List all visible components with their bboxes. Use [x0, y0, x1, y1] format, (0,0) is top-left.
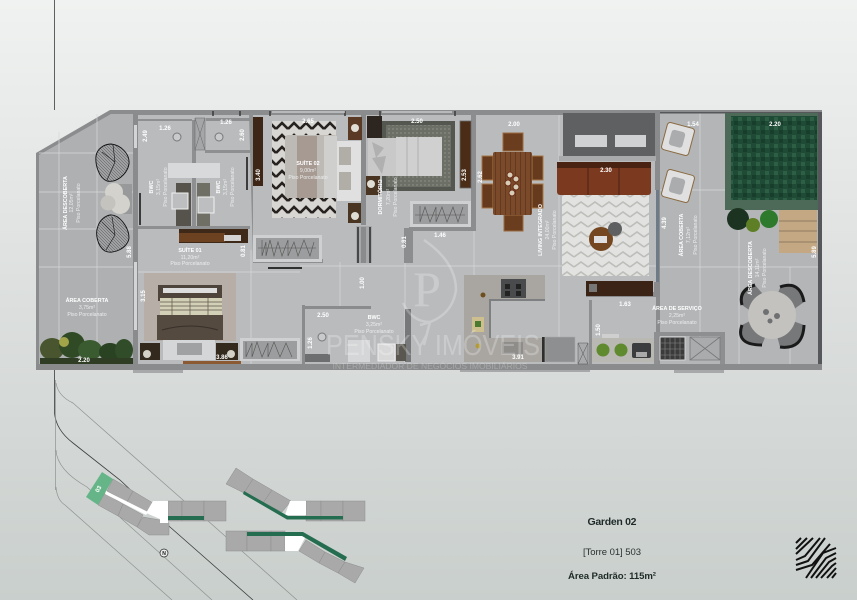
sofa	[557, 162, 651, 195]
label: area de servico	[652, 305, 702, 326]
plants right	[727, 208, 778, 232]
dorm nightstand top	[367, 116, 382, 138]
dimensions: 5.88	[127, 246, 133, 258]
rug living	[562, 195, 649, 276]
closet upper	[253, 235, 322, 262]
toilet left	[173, 133, 181, 141]
label: dormitorio: Piso Porcelanato	[393, 177, 399, 217]
label: area descoberta right: Piso Porcelanato	[762, 248, 768, 288]
dimensions: 1.26	[308, 337, 314, 349]
nightstand right	[216, 343, 238, 360]
dimensions: 1.63	[619, 302, 631, 308]
building slab	[36, 110, 822, 370]
label: area descoberta left: Piso Porcelanato	[76, 183, 82, 223]
dimensions	[78, 119, 818, 364]
label: area de servico: ÁREA DE SERVIÇO	[652, 305, 702, 312]
right wall	[818, 112, 822, 364]
caption: garden 02: Garden 02	[588, 516, 637, 528]
label: suite 02: 9,00m²	[300, 168, 316, 174]
label: bwc left: Piso Porcelanato	[163, 167, 169, 207]
label: dormitorio	[376, 177, 399, 217]
wardrobe suite 01	[253, 117, 263, 186]
highlighted unit 503: 03	[95, 485, 104, 494]
small shaft	[578, 343, 588, 364]
dimensions: 2.50	[411, 119, 423, 125]
label: suite 02: SUÍTE 02	[296, 159, 320, 167]
label: area coberta left	[66, 297, 109, 318]
sink left	[172, 193, 188, 209]
floor grid	[39, 113, 818, 364]
icon: striped logo	[796, 538, 836, 578]
label: bwc lower	[354, 315, 394, 335]
furniture: woven armchair top	[96, 144, 129, 181]
watermark	[326, 240, 540, 371]
tower 01 corridor	[105, 491, 148, 515]
coffee table	[589, 222, 622, 251]
suite 02 nightstand top	[348, 117, 362, 140]
label: suite 01	[170, 246, 210, 267]
dimensions: 3.86	[216, 355, 228, 361]
label: suite 01: 11,20m²	[181, 255, 200, 261]
suite 02 bed	[285, 135, 361, 201]
dimensions: 1.00	[360, 277, 366, 289]
label: area coberta right: ÁREA COBERTA	[678, 213, 685, 256]
dimensions: 2.00	[508, 122, 520, 128]
strip floor	[183, 361, 241, 364]
label: area coberta left: 3,75m²	[79, 305, 95, 311]
label: bwc lower: 3,25m²	[366, 322, 382, 328]
stairs	[779, 210, 817, 253]
caption: standard area: Área Padrão: 115m²	[568, 570, 656, 582]
tower 02 green strip	[243, 491, 343, 520]
room labels	[62, 159, 768, 335]
wall: left terrace wall	[133, 113, 138, 364]
dimensions: 3.15	[141, 290, 147, 302]
watermark: PENSKY IMÓVEIS	[326, 329, 540, 362]
dining set	[482, 133, 543, 231]
label: area descoberta right: ÁREA DESCOBERTA	[747, 241, 754, 295]
dorm wardrobe	[460, 121, 471, 188]
tower 01 courtyard	[146, 501, 168, 523]
closet lower	[240, 338, 300, 361]
dimensions: 3.91	[512, 355, 524, 361]
suite 02 rug	[272, 121, 336, 218]
cabinet right	[197, 183, 210, 226]
rug suite 01	[144, 273, 236, 341]
label: living integrado: LIVING INTEGRADO	[538, 204, 544, 256]
round table and chairs	[741, 285, 804, 347]
site plan	[56, 380, 365, 600]
plants left terrace	[40, 332, 133, 364]
label: bwc right: Piso Porcelanato	[230, 167, 236, 207]
highlighted unit 503	[86, 472, 113, 505]
wall: top window marks	[213, 111, 455, 116]
label: living integrado: 24,00m²	[545, 220, 551, 240]
wall: suite and dorm divider	[361, 113, 366, 225]
wall: service area	[589, 300, 725, 364]
watermark: P	[413, 261, 441, 317]
armchair top	[661, 122, 695, 156]
label: living integrado	[538, 204, 558, 256]
label: area descoberta left: ÁREA DESCOBERTA	[62, 176, 69, 230]
tower 03	[226, 531, 364, 583]
bed suite 01	[157, 285, 223, 360]
street line behind plan	[54, 0, 253, 600]
dimensions: 2.65	[302, 119, 314, 125]
tower 03 courtyard	[285, 536, 306, 551]
label: bwc lower: Piso Porcelanato	[354, 329, 394, 335]
label: area coberta left: Piso Porcelanato	[67, 312, 107, 318]
shaft	[195, 118, 205, 150]
watermark: INTERMEDIADOR DE NEGÓCIOS IMOBILIÁRIOS	[332, 362, 528, 371]
dimensions: 2.20	[78, 358, 90, 364]
dorm rug	[382, 121, 455, 191]
balcony storage	[559, 113, 656, 161]
label: area coberta right: 7,12m²	[686, 227, 692, 243]
label: area de servico: Piso Porcelanato	[657, 320, 697, 326]
floor: right terrace	[660, 113, 818, 364]
furniture: woven armchair bottom	[97, 215, 129, 252]
cabinet left	[176, 183, 191, 226]
tower 03 green strip	[247, 532, 347, 561]
label: area descoberta left	[62, 176, 82, 230]
suite 02 nightstand bottom	[348, 203, 361, 223]
label: bwc lower: BWC	[368, 315, 381, 321]
north marker: N	[162, 551, 166, 557]
floor plan	[36, 110, 822, 373]
floor: left terrace	[39, 114, 133, 364]
nightstand left	[140, 343, 160, 360]
label: living integrado: Piso Porcelanato	[552, 210, 558, 250]
tower 02 courtyard	[285, 501, 306, 515]
windows on left wall	[134, 125, 137, 330]
tv unit	[586, 281, 653, 296]
label: suite 01: Piso Porcelanato	[170, 261, 210, 267]
dimensions: 5.89	[812, 246, 818, 258]
wall: dorm closet	[404, 113, 476, 263]
label: bwc right	[216, 167, 236, 207]
dimensions: 2.50	[317, 313, 329, 319]
dimensions: 1.50	[596, 324, 602, 336]
label: area descoberta right: 14,11m²	[755, 258, 761, 277]
caption: tower and unit: [Torre 01] 503	[583, 547, 641, 558]
label: area coberta right: Piso Porcelanato	[693, 215, 699, 255]
label: bwc left: 3,15m²	[156, 179, 162, 195]
tower 01	[98, 479, 226, 535]
label: dormitorio: 7,20m²	[386, 189, 392, 205]
wall: sliding door suite 01	[139, 193, 141, 225]
dorm closet	[410, 201, 471, 227]
fridge	[542, 337, 575, 362]
dimensions: 2.62	[478, 171, 484, 183]
roads	[56, 380, 297, 600]
dimensions: 2.60	[240, 129, 246, 141]
north marker	[160, 549, 168, 557]
dorm bed	[368, 137, 442, 176]
armchair bottom	[661, 169, 695, 203]
label: area coberta left: ÁREA COBERTA	[66, 297, 109, 304]
dimensions: 1.54	[687, 122, 699, 128]
wall: living balcony	[655, 110, 660, 190]
wall: bathrooms	[138, 113, 323, 263]
label: area de servico: 2,25m²	[669, 313, 685, 319]
vanity suite 01	[179, 229, 248, 243]
label: area coberta right	[678, 213, 699, 256]
label: bwc left: BWC	[149, 180, 155, 193]
label: suite 01: SUÍTE 01	[178, 246, 202, 254]
furniture: ottomans	[100, 183, 132, 214]
label: area descoberta left: 12,05m²	[69, 193, 75, 213]
label: bwc left	[149, 167, 169, 207]
tower 02	[226, 468, 365, 521]
wall: lower bathroom	[302, 305, 371, 364]
label: suite 02: Piso Porcelanato	[288, 175, 328, 181]
label: bwc right: BWC	[216, 180, 222, 193]
sink right	[198, 197, 214, 213]
label: dormitorio: DORMITÓRIO	[376, 179, 384, 215]
dimensions: 2.49	[143, 130, 149, 142]
service counter	[592, 334, 654, 362]
shower glass	[168, 163, 220, 178]
bottom wall	[36, 364, 822, 370]
label: bwc right: 3,15m²	[223, 179, 229, 195]
dimensions: 0.81	[241, 245, 247, 257]
green wall	[725, 113, 818, 210]
dimensions: 2.53	[462, 169, 468, 181]
dimensions: 2.30	[600, 168, 612, 174]
dimensions: 1.26	[159, 126, 171, 132]
floor: interior	[138, 115, 656, 364]
kitchen counter	[464, 275, 545, 362]
dimensions: 1.26	[220, 120, 232, 126]
label: suite 02	[288, 159, 328, 181]
dimensions: 4.39	[662, 217, 668, 229]
laundry box	[660, 337, 685, 360]
dimensions: 1.46	[434, 233, 446, 239]
label: area descoberta right	[747, 241, 768, 295]
dimensions: 3.40	[256, 169, 262, 181]
dimensions: 0.81	[402, 236, 408, 248]
toilet right	[215, 133, 223, 141]
service shaft	[690, 337, 720, 360]
bathroom fixtures	[168, 118, 248, 226]
dorm nightstand bottom	[366, 176, 380, 195]
door	[268, 267, 302, 269]
dimensions: 2.20	[769, 122, 781, 128]
tower 01 green strip	[168, 516, 204, 520]
lower bathroom fixtures	[305, 333, 406, 362]
